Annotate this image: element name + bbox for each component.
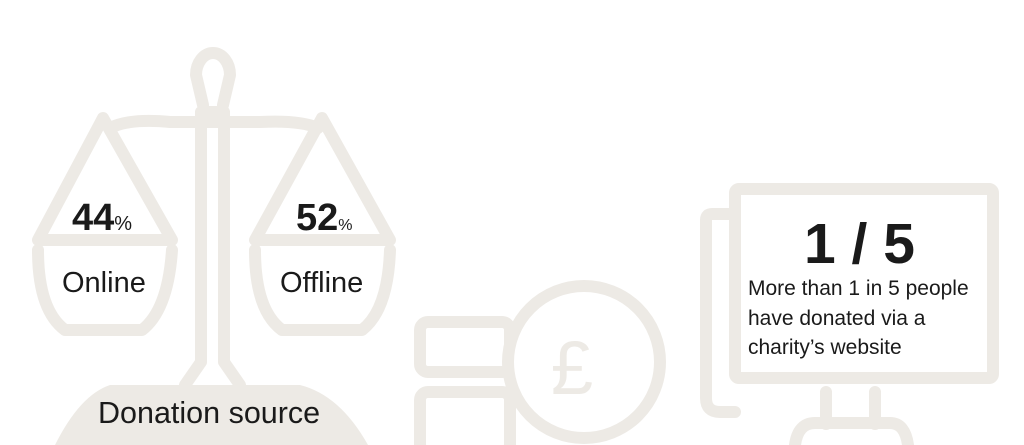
icon: pound sign: £ [551, 326, 593, 411]
label: Online: Online [62, 267, 146, 299]
icon: balance scale [38, 53, 390, 385]
stat: 52%: 52% [296, 197, 353, 239]
text: website donation description: have donated via a [748, 306, 925, 330]
stat: 44%: 44% [72, 197, 132, 239]
text: website donation description: More than 1 in 5 people [748, 277, 969, 300]
label: Offline: Offline [280, 267, 363, 299]
label: Donation source: Donation source [98, 396, 320, 430]
text: website donation description [748, 277, 969, 359]
stat: 1/5: 1 / 5 [804, 212, 915, 276]
icon: coins [420, 286, 660, 445]
icon: monitor [706, 189, 993, 445]
text: website donation description: charity’s website [748, 336, 902, 359]
